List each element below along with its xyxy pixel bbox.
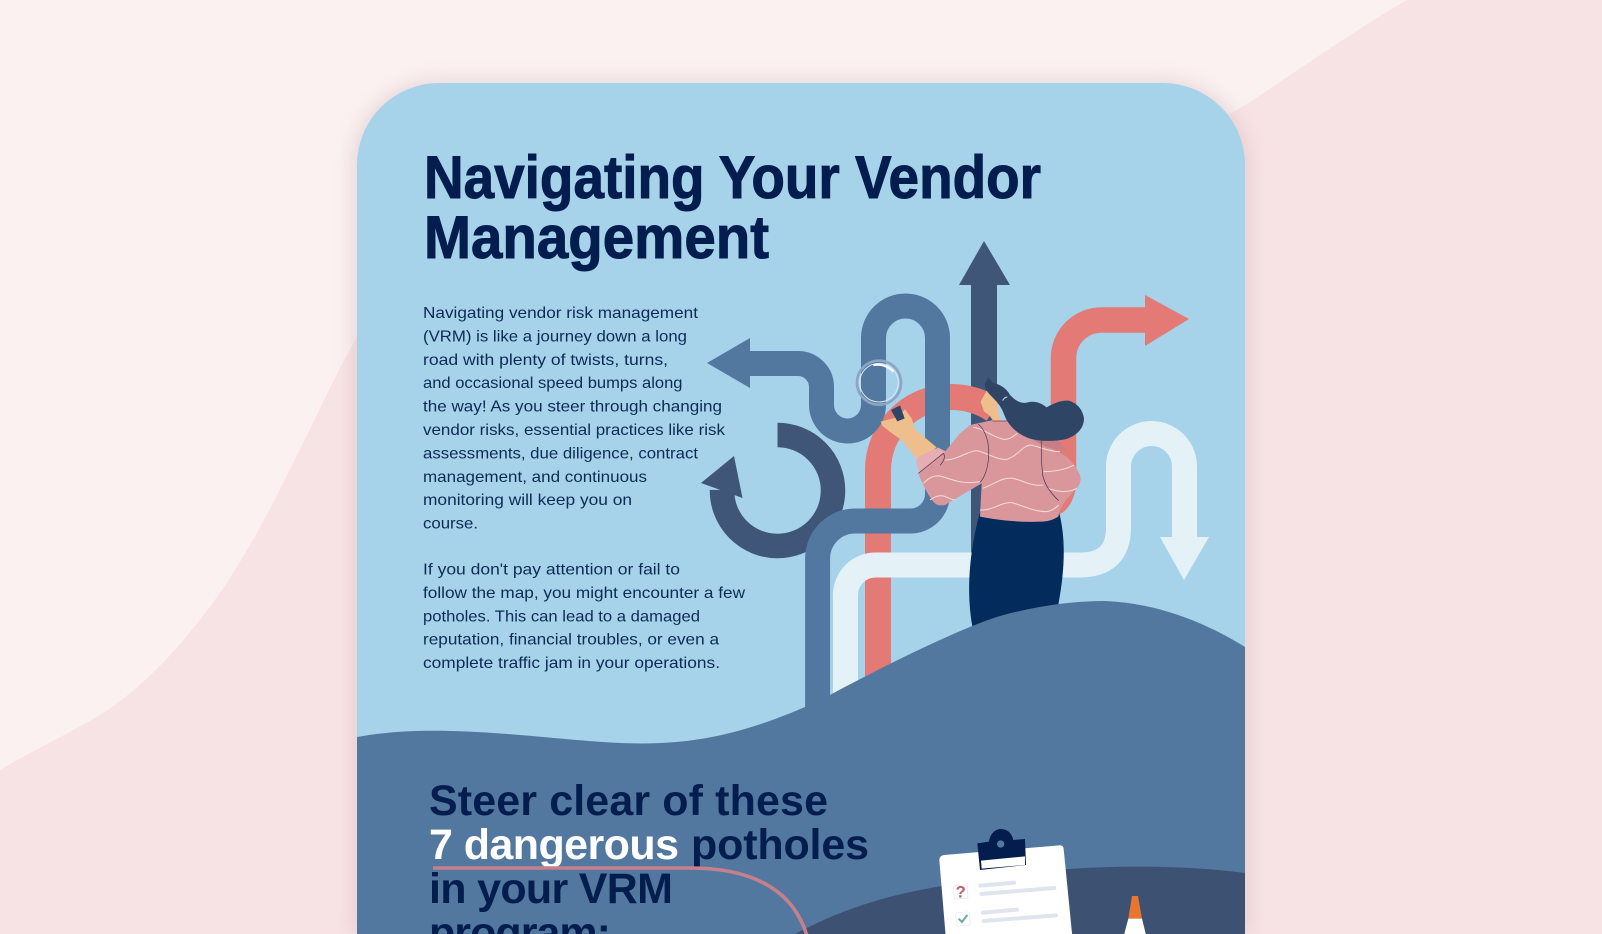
curved underline <box>433 868 807 934</box>
illustration: woman with magnifier <box>857 361 1084 630</box>
sweater <box>918 420 1081 522</box>
face and neck <box>981 391 1001 421</box>
road: red arch <box>878 397 994 700</box>
sweater wave lines <box>923 427 1077 512</box>
hill: dark lower <box>795 867 1245 934</box>
icon: clipboard <box>939 829 1146 934</box>
text block: intro paragraph: (VRM) is like a journey down a long <box>423 328 687 345</box>
text block: intro paragraph: and occasional speed bumps along <box>423 375 682 392</box>
card shadow <box>352 80 1250 934</box>
hair <box>985 377 1084 441</box>
magnifier phone handle <box>891 405 905 421</box>
magnifier <box>857 361 901 405</box>
checked row <box>956 910 1056 926</box>
title <box>424 144 1041 271</box>
text block: intro paragraph: monitoring will keep you on <box>423 492 632 509</box>
heading: potholes: 7 dangerous <box>429 821 679 869</box>
hair clip <box>1003 397 1007 401</box>
sweater back shade <box>1060 490 1076 514</box>
arrow: blue left winding <box>707 306 938 720</box>
arrow: dark circular <box>701 435 833 546</box>
title: Management <box>424 204 769 271</box>
text block: intro paragraph: Navigating vendor risk management <box>423 305 699 322</box>
sweater seams <box>918 424 1059 501</box>
clipboard clip <box>977 829 1026 870</box>
question row: ? <box>956 883 966 902</box>
figure upper body <box>857 361 1084 522</box>
arrow: red right <box>1064 295 1189 480</box>
panel: main card <box>357 83 1245 934</box>
text block: intro paragraph: vendor risks, essential practices like risk <box>423 422 726 439</box>
heading: potholes: Steer clear of these <box>429 777 828 825</box>
icon: traffic cone <box>1124 896 1146 934</box>
trousers <box>969 512 1064 630</box>
hair shadow <box>1034 440 1066 450</box>
text block: second paragraph <box>423 562 745 672</box>
question row <box>953 883 1054 902</box>
illustration: road arrows <box>701 241 1209 720</box>
text block: intro paragraph: the way! As you steer through changing <box>423 399 722 416</box>
text block: intro paragraph: road with plenty of twists, turns, <box>423 352 668 369</box>
text block: intro paragraph: management, and continuous <box>423 469 647 486</box>
text block: intro paragraph: assessments, due diligence, contract <box>423 445 699 462</box>
text block: second paragraph: potholes. This can lead to a damaged <box>423 608 700 625</box>
text block: second paragraph: If you don't pay attention or fail to <box>423 562 680 578</box>
heading: potholes: potholes <box>691 821 869 869</box>
text block: intro paragraph: course. <box>423 516 478 533</box>
text block: second paragraph: reputation, financial troubles, or even a <box>423 632 719 649</box>
arrow: white down winding <box>846 434 1209 715</box>
text block: intro paragraph <box>423 305 726 533</box>
arrow: dark up <box>959 241 1010 560</box>
text block: second paragraph: follow the map, you might encounter a few <box>423 585 745 602</box>
hill: foreground <box>357 601 1245 934</box>
forearm and hand <box>881 409 937 462</box>
collar <box>992 420 1008 422</box>
text block: second paragraph: complete traffic jam in your operations. <box>423 655 720 672</box>
title: Navigating Your Vendor <box>424 144 1041 211</box>
sleeve cuff <box>916 448 946 474</box>
heading: potholes <box>429 777 869 934</box>
heading: potholes: in your VRM <box>429 865 673 913</box>
